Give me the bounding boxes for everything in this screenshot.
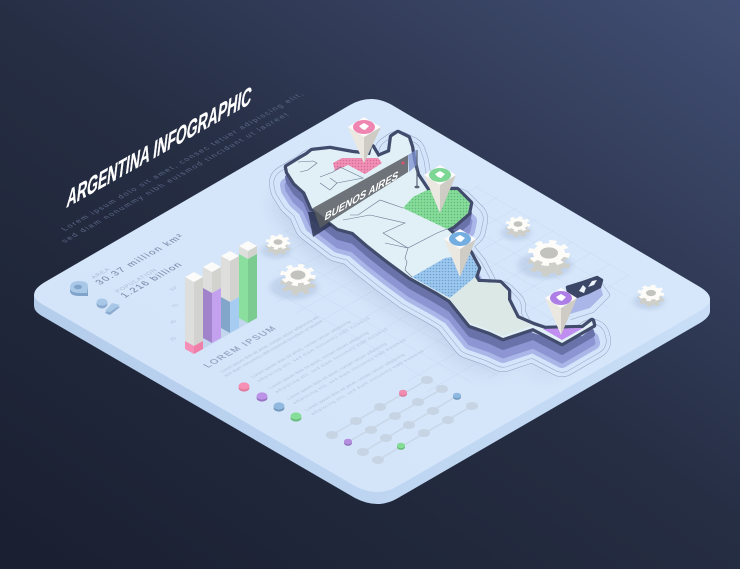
chart axis labels: 75 xyxy=(171,303,181,309)
icon: location pin xyxy=(70,281,88,296)
stat: area: AREA xyxy=(91,267,113,280)
gear large centre xyxy=(518,242,572,279)
gear small top left xyxy=(261,235,291,259)
pin: green xyxy=(424,165,456,213)
paragraph text: Lorem ipsum dolo sit amet, consec tetuer adipiscing elit xyxy=(219,315,321,373)
label: Buenos Aires xyxy=(308,155,408,237)
southern region xyxy=(437,277,533,336)
bar: green xyxy=(239,241,257,323)
pink region xyxy=(333,158,382,174)
title: ARGENTINA INFOGRAPHIC xyxy=(65,80,253,214)
paragraph text: Lorem ipsum dolo sit amet, consec tetuer adipiscing xyxy=(250,320,352,378)
icon: person xyxy=(96,298,120,315)
slider chart xyxy=(326,376,478,464)
paragraph text: adipiscing elit, sed diam nonummy nibh euismod xyxy=(256,316,371,382)
paragraph text: adipiscing elit, sed diam nonummy nibh euismod xyxy=(292,338,407,404)
gear small centre xyxy=(501,217,531,241)
chart axis labels: 45 xyxy=(169,319,179,325)
map grid xyxy=(270,185,645,395)
pin: purple xyxy=(545,288,577,335)
pin: blue xyxy=(444,229,476,277)
bar: purple xyxy=(203,262,221,343)
stat: area: 30.37 million km² xyxy=(93,232,188,286)
gear large left xyxy=(270,266,318,300)
chart axis labels: 25 xyxy=(169,336,179,342)
green region xyxy=(403,190,470,229)
intro text: Lorem ipsum dolo sit amet, consec tetuer adipiscing elit, xyxy=(59,91,306,232)
legend markers xyxy=(238,382,302,422)
paragraph text: sed diam nonummy nibh euismod tincidunt ut laoreet xyxy=(223,319,325,377)
chart axis labels xyxy=(169,285,181,342)
paragraph text: adipiscing elit, sed diam nonummy nibh euismod xyxy=(310,349,425,415)
paragraph text xyxy=(219,315,425,415)
paragraph text: adipiscing elit, sed diam nonummy nibh euismod xyxy=(274,327,389,393)
stat: population: POPULATION xyxy=(115,268,160,294)
bar chart xyxy=(185,241,257,354)
stat: population: 1.216 billion xyxy=(118,261,186,299)
label: Buenos Aires: BUENOS AIRES xyxy=(323,168,400,224)
chart axis labels: 50° xyxy=(169,285,180,292)
slider handles xyxy=(344,390,461,450)
flag pole xyxy=(408,150,420,188)
paragraph text: Lorem ipsum dolo sit amet, consec tetuer adipiscing xyxy=(268,331,370,389)
bar: pink xyxy=(185,272,203,354)
gear small right xyxy=(633,286,665,310)
bar: blue xyxy=(221,251,239,333)
islands xyxy=(565,277,607,317)
heading: Lorem ipsum: LOREM IPSUM xyxy=(201,324,279,369)
paragraph text: Lorem ipsum dolo sit amet, consec tetuer adipiscing xyxy=(286,342,388,400)
province borders xyxy=(298,161,447,277)
purple region xyxy=(543,328,583,340)
paragraph text: Lorem ipsum dolo sit amet, consec tetuer adipiscing xyxy=(304,353,406,411)
board xyxy=(34,99,710,504)
blue region xyxy=(412,254,478,298)
pin: pink xyxy=(348,117,381,163)
map of Argentina xyxy=(271,133,593,377)
intro text: sed diam nonummy nibh euismod tincidunt ut laoreet xyxy=(59,111,292,244)
